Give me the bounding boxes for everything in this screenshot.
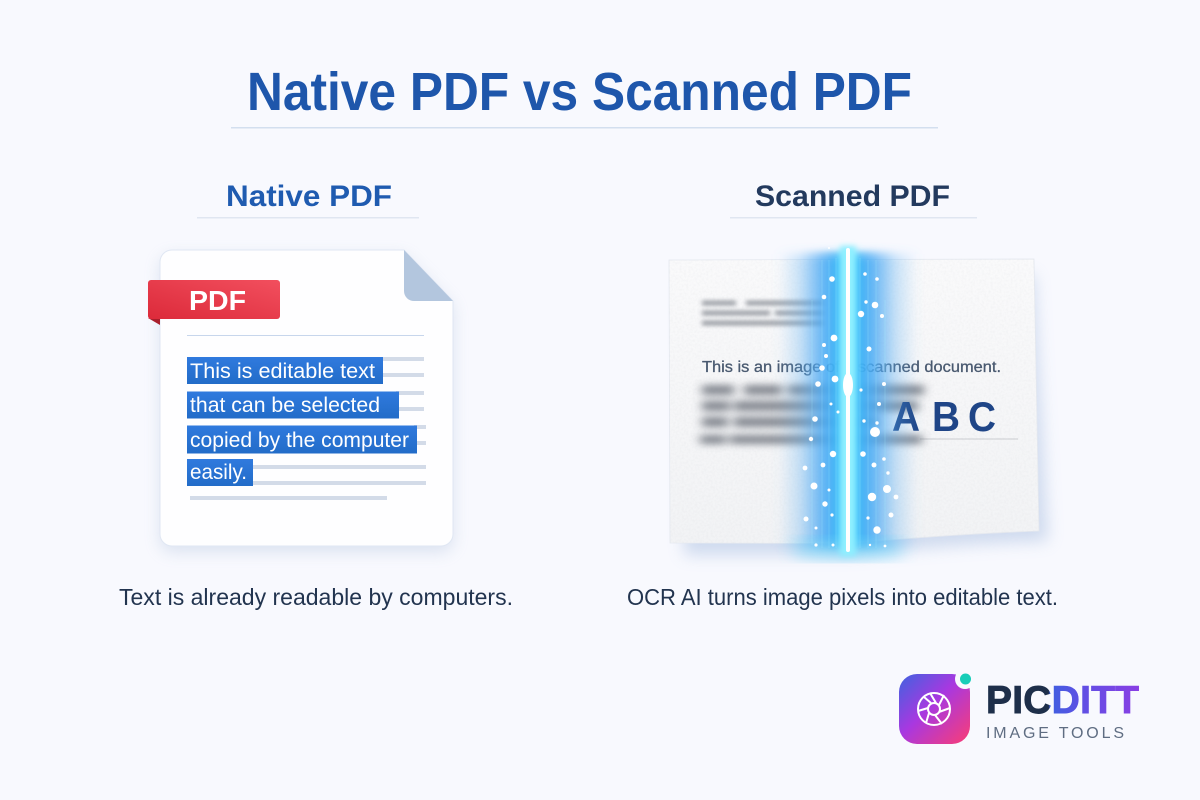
particles <box>803 247 898 547</box>
recognised letters: B <box>932 393 960 440</box>
OCR scan beam <box>778 246 918 557</box>
icon: folded corner <box>404 250 453 301</box>
caption: scanned: OCR AI turns image pixels into editable text. <box>627 584 1058 610</box>
caption: native: Text is already readable by computers. <box>119 584 513 610</box>
PDF ribbon: PDF <box>189 285 246 316</box>
icon: aperture <box>918 693 950 725</box>
selected text: easily. <box>190 461 247 484</box>
logo: Picditt <box>899 669 1139 744</box>
selected text: This is editable text <box>190 360 375 383</box>
scanned sentence: This is an image of a scanned document. <box>702 359 1001 376</box>
tagline: IMAGE TOOLS <box>986 725 1124 742</box>
title: Native PDF vs Scanned PDF <box>247 62 912 122</box>
recognised letters: C <box>968 393 996 440</box>
selected text <box>187 357 417 486</box>
PDF ribbon <box>148 280 280 325</box>
background text lines <box>190 357 426 500</box>
icon: app tile <box>899 669 975 744</box>
heading: Native PDF: Native PDF <box>226 180 392 213</box>
panel: scanned paper <box>669 259 1048 555</box>
recognised letters <box>892 393 996 440</box>
blurred scan lines <box>700 300 1018 444</box>
wordmark: PICDITT <box>986 679 1139 722</box>
recognised letters: A <box>892 393 920 440</box>
selected text: that can be selected <box>190 394 380 417</box>
heading: Scanned PDF: Scanned PDF <box>755 180 950 213</box>
selected text: copied by the computer <box>190 429 409 452</box>
panel: native PDF document <box>148 250 453 552</box>
